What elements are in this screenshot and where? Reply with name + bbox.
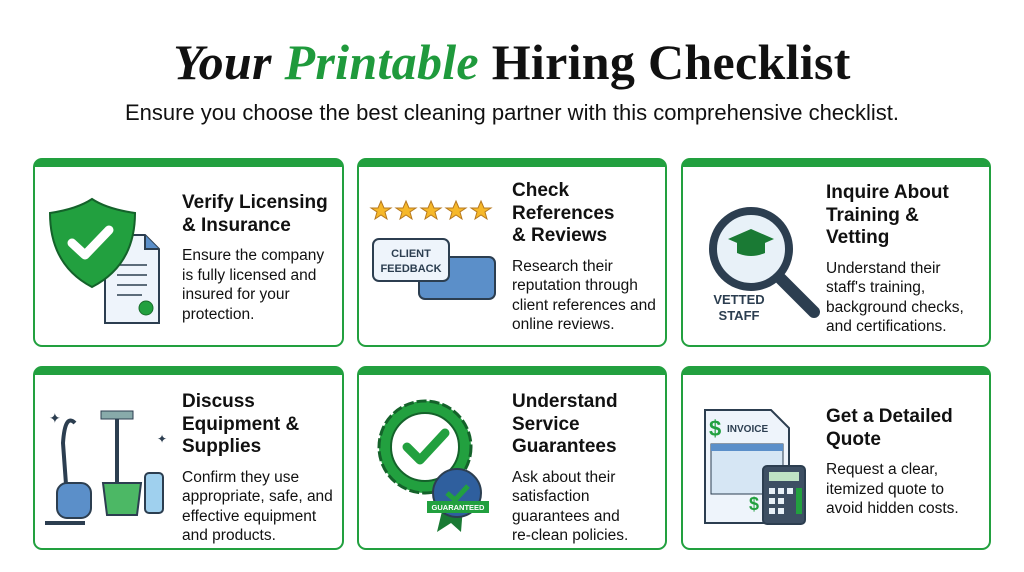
text: training (826, 182, 964, 335)
text: references: & Reviews (512, 225, 607, 246)
text: licensing: Ensure the company (182, 247, 324, 264)
text: training: Inquire About (826, 182, 949, 203)
icon: stars and feedback bubbles: FEEDBACK (380, 263, 442, 275)
text: licensing: insured for your (182, 286, 290, 303)
text: guarantees (512, 391, 628, 544)
icon: magnifier vetted staff (709, 207, 820, 322)
text: guarantees: Ask about their (512, 468, 615, 486)
text: quote: Quote (826, 428, 881, 450)
text: guarantees: guarantees and (512, 508, 620, 524)
icon: invoice and calculator: $ (749, 494, 759, 514)
icon: stars and feedback bubbles (370, 200, 496, 300)
text: quote: itemized quote to (826, 480, 944, 498)
text: licensing: & Insurance (182, 214, 291, 236)
text: equipment: appropriate, safe, and (182, 488, 333, 505)
text: equipment: Confirm they use (182, 468, 299, 486)
icon: cleaning supplies (45, 410, 167, 525)
panel: equipment (33, 366, 344, 550)
text: licensing (182, 192, 328, 322)
text: guarantees: re-clean policies. (512, 527, 628, 544)
text: training: Understand their (826, 260, 941, 276)
icon: cleaning supplies: ✦ (49, 410, 61, 426)
icon: guarantee badge: GUARANTEED (432, 503, 485, 512)
text: training: background checks, (826, 298, 964, 316)
text: guarantees: Service (512, 414, 580, 434)
text: quote: Request a clear, (826, 461, 938, 478)
text: guarantees: satisfaction (512, 488, 590, 505)
text: references: reputation through (512, 277, 638, 294)
text: references (512, 180, 656, 333)
icon: magnifier vetted staff: VETTED (713, 292, 765, 307)
subtitle: Ensure you choose the best cleaning partner with this comprehensive checklist. (125, 100, 899, 125)
text: training: and certifications. (826, 318, 947, 335)
text: equipment: Discuss (182, 391, 255, 412)
text: equipment: effective equipment (182, 508, 316, 524)
text: quote: avoid hidden costs. (826, 500, 959, 517)
panel: quote (681, 366, 991, 550)
title: Your Printable Hiring Checklist (173, 34, 851, 90)
text: training: staff's training, (826, 279, 925, 296)
text: equipment: Supplies (182, 436, 261, 457)
text: references: Research their (512, 258, 613, 274)
text: guarantees: Guarantees (512, 436, 617, 457)
text: equipment: Equipment & (182, 414, 299, 434)
text: licensing: is fully licensed and (182, 266, 316, 284)
icon: cleaning supplies: ✦ (157, 432, 167, 446)
text: licensing: Verify Licensing (182, 192, 328, 213)
text: licensing: protection. (182, 306, 254, 322)
text: training: Vetting (826, 227, 889, 248)
text: quote (826, 406, 959, 517)
icon: shield and document (49, 198, 160, 324)
icon: invoice and calculator (704, 409, 806, 525)
icon: invoice and calculator: $ (709, 416, 721, 441)
panel: guarantees (357, 366, 667, 550)
icon: invoice and calculator: INVOICE (727, 424, 768, 435)
text: guarantees: Understand (512, 391, 618, 412)
text: training: Training & (826, 204, 919, 226)
text: equipment (182, 391, 333, 544)
icon: guarantee badge (378, 400, 489, 532)
panel: references (357, 158, 667, 347)
text: references: client references and (512, 296, 656, 314)
panel: licensing (33, 158, 344, 347)
text: quote: Get a Detailed (826, 406, 953, 427)
text: references: Check (512, 180, 569, 201)
text: references: References (512, 202, 614, 224)
text: equipment: and products. (182, 527, 276, 544)
panel: training (681, 158, 991, 347)
text: references: online reviews. (512, 316, 615, 333)
icon: stars and feedback bubbles: CLIENT (391, 248, 431, 260)
